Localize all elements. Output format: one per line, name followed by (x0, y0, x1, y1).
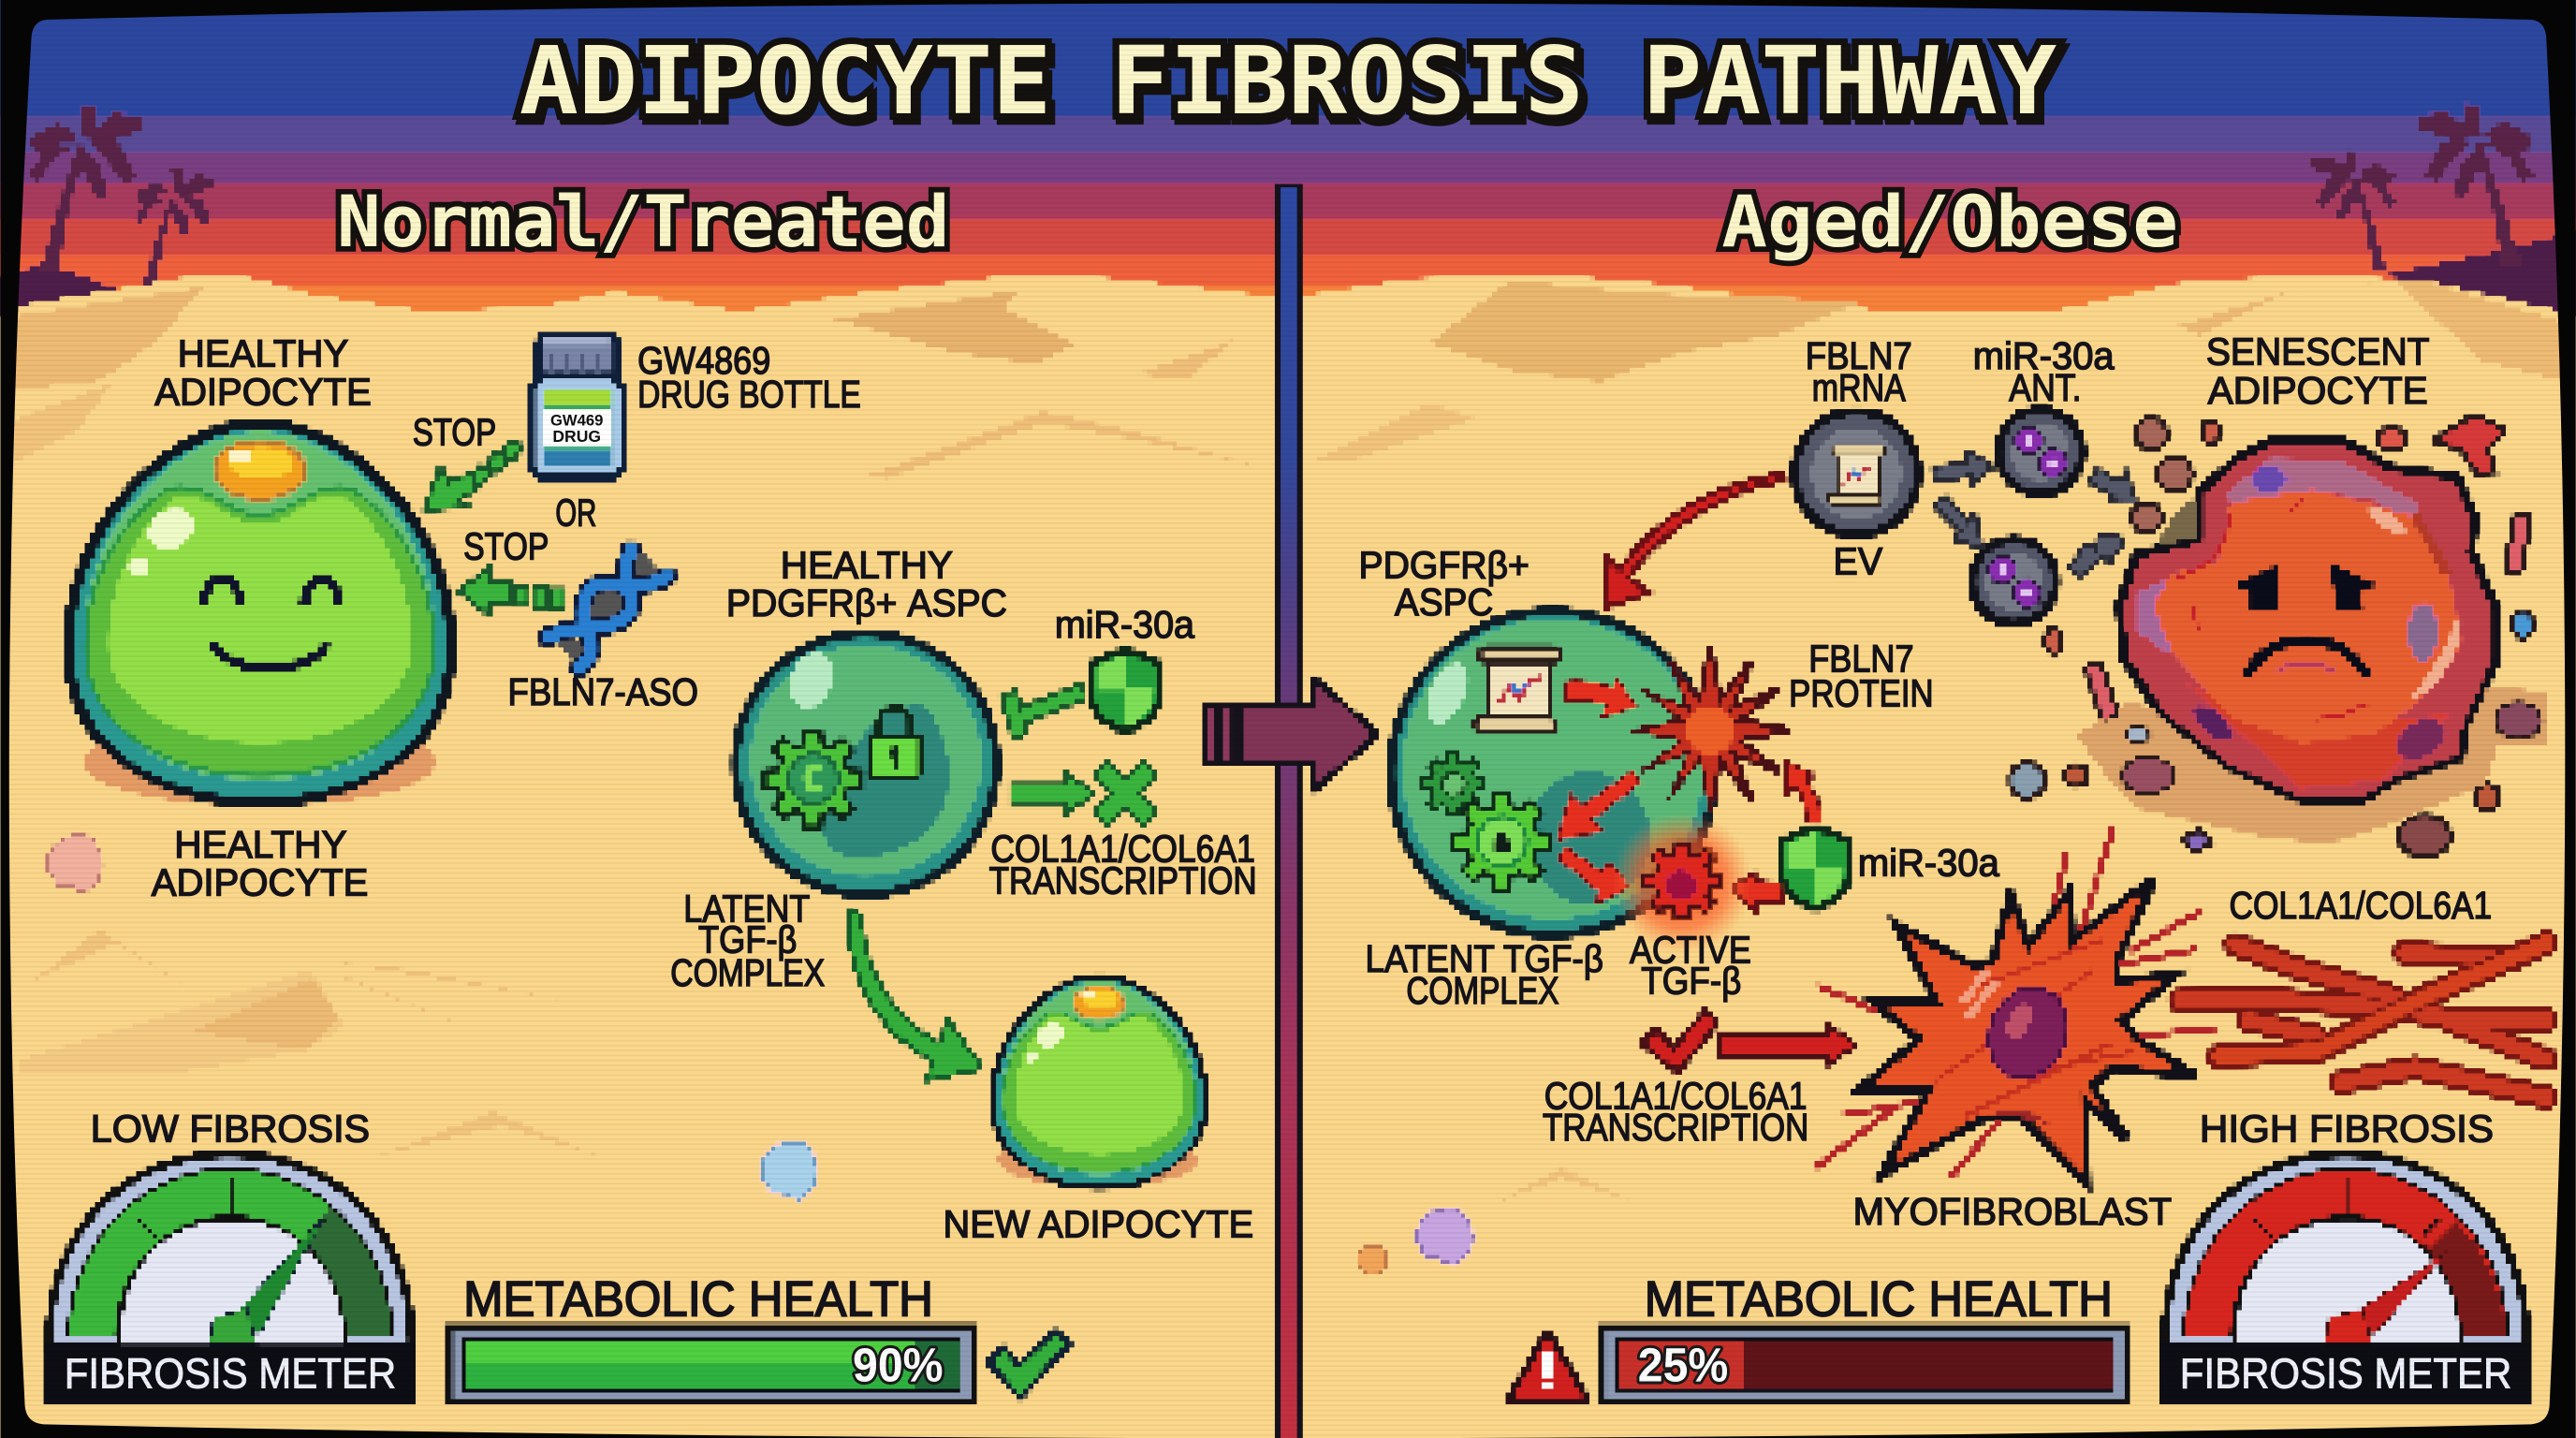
title: ADIPOCYTE FIBROSIS PATHWAY (520, 26, 2056, 136)
bottle label text: DRUG (552, 427, 601, 446)
value: 25 percent: 25% (1638, 1339, 1728, 1392)
arrow: FBLN7 to ASPC (1606, 475, 1784, 606)
label: healthy adipocyte bottom: ADIPOCYTE (152, 860, 368, 903)
icon: check mark (989, 1332, 1068, 1397)
icon: padlock (870, 708, 920, 777)
label: metabolic health: METABOLIC HEALTH (463, 1272, 933, 1328)
panel: aged obese (1358, 330, 2546, 1403)
icon: red check (1643, 1012, 1717, 1071)
label: latent complex (670, 887, 825, 994)
sad face (2232, 562, 2380, 679)
arrow: bottle stops adipocyte (426, 440, 522, 509)
label: FBLN7 mRNA (1806, 334, 1912, 409)
label: EV: EV (1834, 539, 1882, 582)
label: collagen: COL1A1/COL6A1 (2229, 884, 2492, 927)
label: high fibrosis: HIGH FIBROSIS (2200, 1108, 2494, 1151)
grey arrows (1934, 453, 2135, 575)
label: miR-30a: miR-30a (1055, 603, 1195, 646)
progress bar: 25 percent (1603, 1328, 2128, 1401)
label: healthy adipocyte top: ADIPOCYTE (154, 371, 372, 414)
icon: X mark (1096, 764, 1157, 825)
FBLN7 protein (1632, 648, 1789, 813)
center arrow (1205, 680, 1377, 788)
bottle label text: GW469 (550, 411, 603, 429)
active TGF-beta (1613, 814, 1751, 951)
label: GW4869 drug bottle: DRUG BOTTLE (637, 373, 861, 416)
label: transcription blocked: COL1A1/COL6A1 (990, 827, 1255, 870)
label: GW4869 drug bottle (637, 339, 861, 416)
label: FBLN7 protein: PROTEIN (1789, 672, 1934, 715)
senescent adipocyte cell (2120, 440, 2496, 801)
arrow: aso stops adipocyte (461, 568, 564, 614)
center divider (1275, 184, 1303, 1438)
label: healthy ASPC: HEALTHY (781, 544, 953, 587)
collagen fibers (2180, 943, 2546, 1097)
label: healthy adipocyte top (154, 331, 372, 414)
icon: shield (1782, 828, 1848, 908)
new adipocyte cell (993, 977, 1205, 1187)
sand stain (2078, 686, 2546, 843)
label: metabolic health: METABOLIC HEALTH (1645, 1272, 2113, 1328)
label: healthy adipocyte bottom (152, 823, 368, 903)
gauge: low fibrosis meter (46, 1155, 414, 1403)
icon: warning triangle (1510, 1332, 1587, 1400)
icon: GW4869 drug bottle (533, 335, 622, 477)
label: healthy adipocyte bottom: HEALTHY (174, 823, 347, 866)
label: miR-30a: miR-30a (1858, 841, 1999, 884)
gauge: high fibrosis meter (2162, 1155, 2530, 1403)
inhibition bar (1003, 685, 1084, 738)
label: fibrosis meter: FIBROSIS METER (2180, 1350, 2511, 1398)
label: myofibroblast: MYOFIBROBLAST (1853, 1190, 2172, 1233)
label: new adipocyte: NEW ADIPOCYTE (944, 1202, 1253, 1245)
label: low fibrosis: LOW FIBROSIS (91, 1108, 370, 1151)
healthy ASPC cell (736, 634, 996, 894)
small vesicle upper (1999, 411, 2082, 492)
sky bands (0, 0, 2576, 329)
label: transcription active: TRANSCRIPTION (1543, 1106, 1808, 1149)
label: miR-30a antagonist: miR-30a (1973, 334, 2115, 377)
icon: shield (1092, 651, 1158, 731)
myofibroblast cell (1815, 827, 2215, 1181)
label: FBLN7 protein (1789, 638, 1934, 715)
label: latent complex: COMPLEX (670, 951, 825, 994)
healthy adipocyte cell (69, 424, 450, 805)
red arrows in ASPC (1558, 675, 1821, 910)
palm trees left (0, 105, 216, 322)
label: active TGF-beta: ACTIVE (1630, 928, 1751, 971)
value: 90 percent: 90% (853, 1339, 944, 1392)
icon: scroll (1475, 647, 1559, 733)
debris particles (2011, 415, 2541, 856)
illustrations: normal treated (46, 335, 1205, 1403)
label: active TGF-beta: TGF-β (1641, 960, 1741, 1003)
label: latent complex: LATENT TGF-β (1365, 937, 1603, 980)
panel: normal treated (46, 331, 1257, 1403)
label: miR-30a antagonist (1973, 334, 2115, 409)
icon: DNA helix (548, 550, 667, 668)
label: latent complex: COMPLEX (1406, 969, 1559, 1012)
label: miR-30a antagonist: ANT. (2009, 366, 2082, 409)
palm trees right (2310, 104, 2576, 322)
icon: small gear (1423, 754, 1485, 815)
icon: gear with lock (1454, 792, 1551, 889)
label: FBLN7 mRNA: mRNA (1812, 366, 1906, 409)
label: healthy ASPC: PDGFRβ+ ASPC (726, 581, 1007, 624)
label: or: OR (555, 492, 596, 535)
arrow to blocked transcription (1012, 773, 1092, 814)
label: PDGFRb ASPC (1358, 544, 1530, 624)
heading: aged/obese: Aged/Obese (1721, 181, 2178, 263)
label: active TGF-beta (1630, 928, 1751, 1003)
heading: normal/treated: Normal/Treated (337, 181, 950, 263)
arrow to myofibroblast (1721, 1025, 1854, 1064)
label: PDGFRb ASPC: PDGFRβ+ (1358, 544, 1530, 587)
label: latent complex: TGF-β (698, 918, 797, 961)
label: GW4869 drug bottle: GW4869 (637, 339, 770, 382)
illustrations: aged obese (1392, 411, 2546, 1403)
label: fibrosis meter: FIBROSIS METER (65, 1350, 396, 1398)
label: senescent adipocyte: ADIPOCYTE (2208, 369, 2428, 412)
label: FBLN7 protein: FBLN7 (1808, 638, 1914, 681)
activated ASPC cell (1392, 612, 1713, 934)
label: transcription blocked: TRANSCRIPTION (989, 859, 1257, 902)
label: transcription blocked (989, 827, 1257, 902)
label: stop: STOP (413, 411, 496, 454)
progress bar: 90 percent (450, 1328, 974, 1401)
shells (48, 836, 1471, 1275)
EV vesicle (1795, 412, 1917, 534)
sand dune shading (13, 279, 2561, 1208)
label: FBLN7 mRNA: FBLN7 (1806, 334, 1912, 377)
label: transcription active: COL1A1/COL6A1 (1544, 1074, 1807, 1117)
bottle label text (550, 411, 603, 446)
label: healthy ASPC (726, 544, 1007, 624)
label: stop second: STOP (463, 524, 549, 567)
label: latent complex: LATENT (683, 887, 810, 930)
label: transcription active (1543, 1074, 1808, 1149)
label: latent complex (1365, 937, 1603, 1012)
icon: gear (765, 730, 862, 828)
label: PDGFRb ASPC: ASPC (1395, 580, 1493, 624)
label: healthy adipocyte top: HEALTHY (178, 331, 348, 374)
label: senescent adipocyte (2206, 330, 2430, 412)
label: FBLN7-ASO: FBLN7-ASO (508, 670, 698, 713)
arrow: differentiation (849, 914, 981, 1079)
small vesicle lower (1973, 540, 2055, 623)
label: senescent adipocyte: SENESCENT (2206, 330, 2430, 374)
